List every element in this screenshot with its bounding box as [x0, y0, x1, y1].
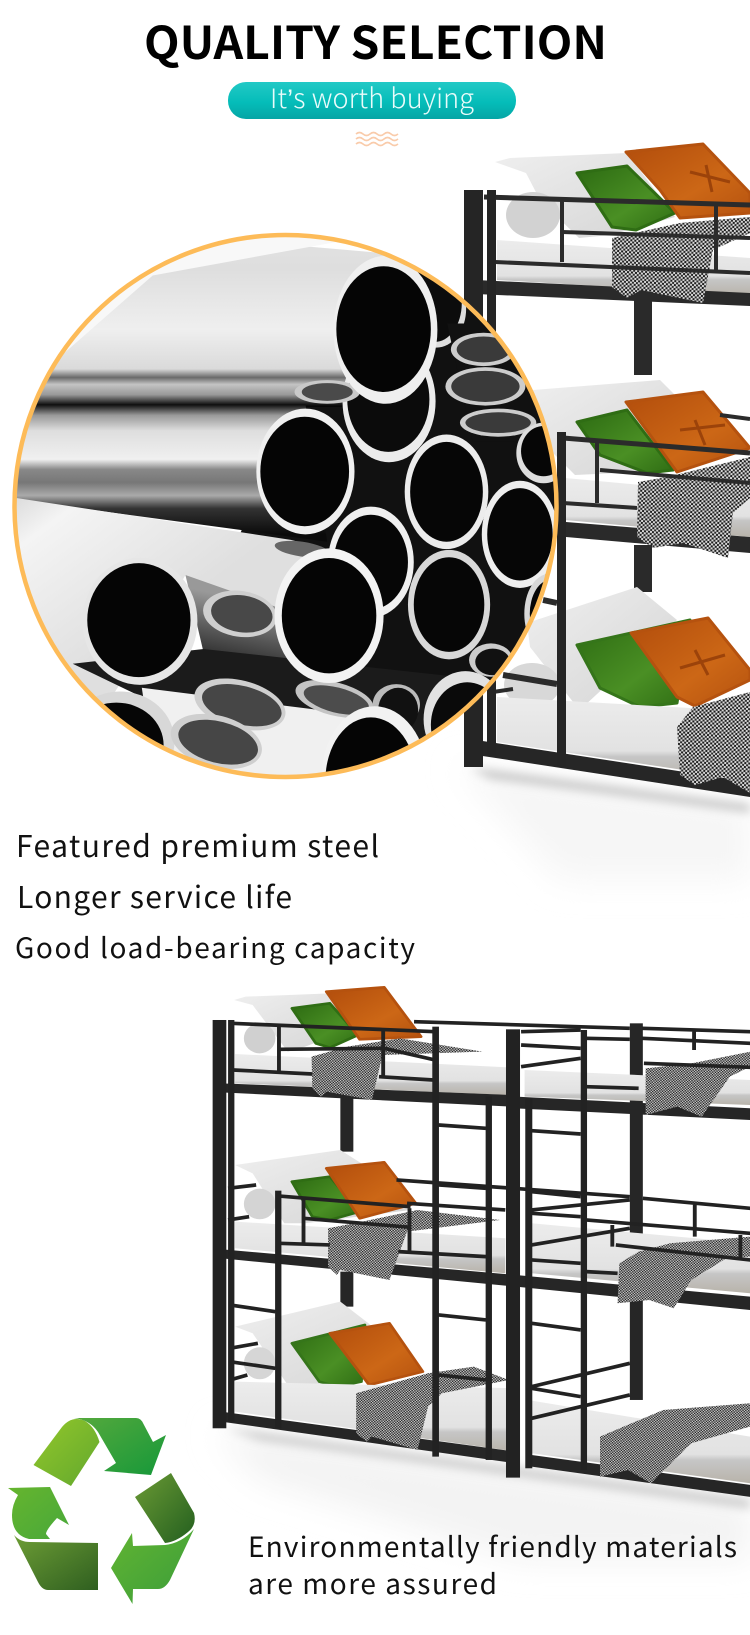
lower dark tubes	[65, 643, 513, 847]
icon: wave ornament	[356, 132, 398, 146]
icon: recycling symbol	[8, 1418, 195, 1604]
environmental text	[248, 1526, 737, 1603]
middle bunk	[530, 380, 750, 592]
circular inset: steel tubes	[12, 232, 559, 780]
middle tier	[221, 1150, 750, 1310]
top bunk	[476, 144, 750, 375]
right stack of tube ends	[328, 423, 574, 659]
middle-left tube	[16, 406, 354, 534]
tube highlight	[66, 241, 310, 352]
bottom bunk	[476, 587, 750, 797]
circle outline	[14, 235, 556, 777]
lower-left tube body	[16, 498, 326, 696]
environmental text: are more assured	[248, 1563, 497, 1603]
dark stack background	[240, 272, 554, 680]
feature list: Good load-bearing capacity	[15, 927, 415, 967]
subtitle pill: It’s worth buying	[270, 77, 474, 116]
title: QUALITY SELECTION	[144, 7, 607, 72]
feature list: Featured premium steel	[16, 822, 379, 866]
feature list	[15, 822, 415, 967]
front tube ends	[83, 548, 384, 685]
feature list: Longer service life	[17, 873, 292, 917]
lower triple bunk bed photo	[213, 987, 750, 1497]
top tier	[221, 987, 750, 1120]
upper triple bunk bed photo	[464, 144, 750, 797]
floor shadow under upper bed	[455, 765, 750, 880]
environmental text: Environmentally friendly materials	[248, 1526, 737, 1566]
bottom tier	[221, 1302, 750, 1497]
rear tube ends	[342, 303, 536, 462]
rear posts and legs	[340, 1023, 643, 1400]
ladder rungs	[439, 1125, 581, 1330]
top tube end	[295, 256, 437, 404]
subtitle pill	[228, 77, 516, 119]
floor shadow under lower bed	[215, 1428, 750, 1560]
bed posts	[464, 190, 566, 767]
upper-left tube body	[36, 247, 384, 407]
ladders and posts	[213, 1020, 587, 1478]
